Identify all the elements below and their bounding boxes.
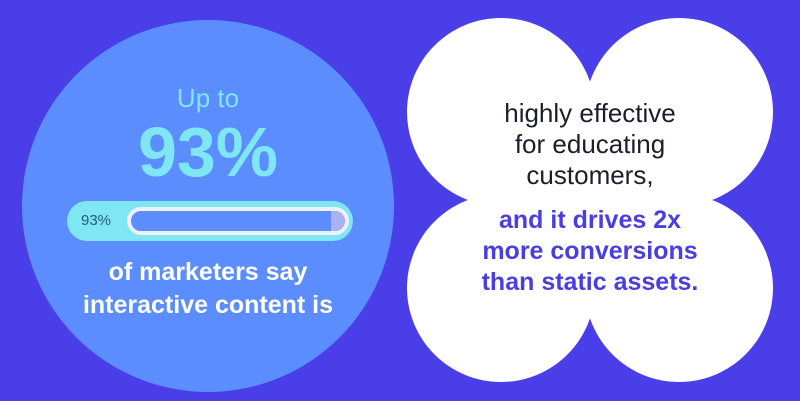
text: highlight lines: and it drives 2x: [499, 206, 681, 234]
text: dark lines: highly effective: [504, 98, 676, 128]
text: dark lines: [504, 98, 676, 190]
text: of marketers say: of marketers say: [109, 258, 307, 286]
text: Up to: Up to: [177, 83, 239, 113]
text: dark lines: for educating: [515, 129, 665, 159]
text: highlight lines: than static assets.: [482, 268, 698, 296]
text: highlight lines: [482, 206, 698, 296]
panel: left circle: [22, 20, 394, 392]
text: highlight lines: more conversions: [482, 237, 698, 265]
text: of marketers say: interactive content is: [83, 291, 333, 319]
text: clover content: [482, 98, 698, 296]
progress bar: [67, 201, 353, 241]
text: 93%: 93%: [138, 113, 278, 191]
text: dark lines: customers,: [526, 160, 654, 190]
bar track: [127, 207, 349, 235]
bar label: 93%: [81, 212, 111, 229]
text: of marketers say: [83, 258, 333, 319]
